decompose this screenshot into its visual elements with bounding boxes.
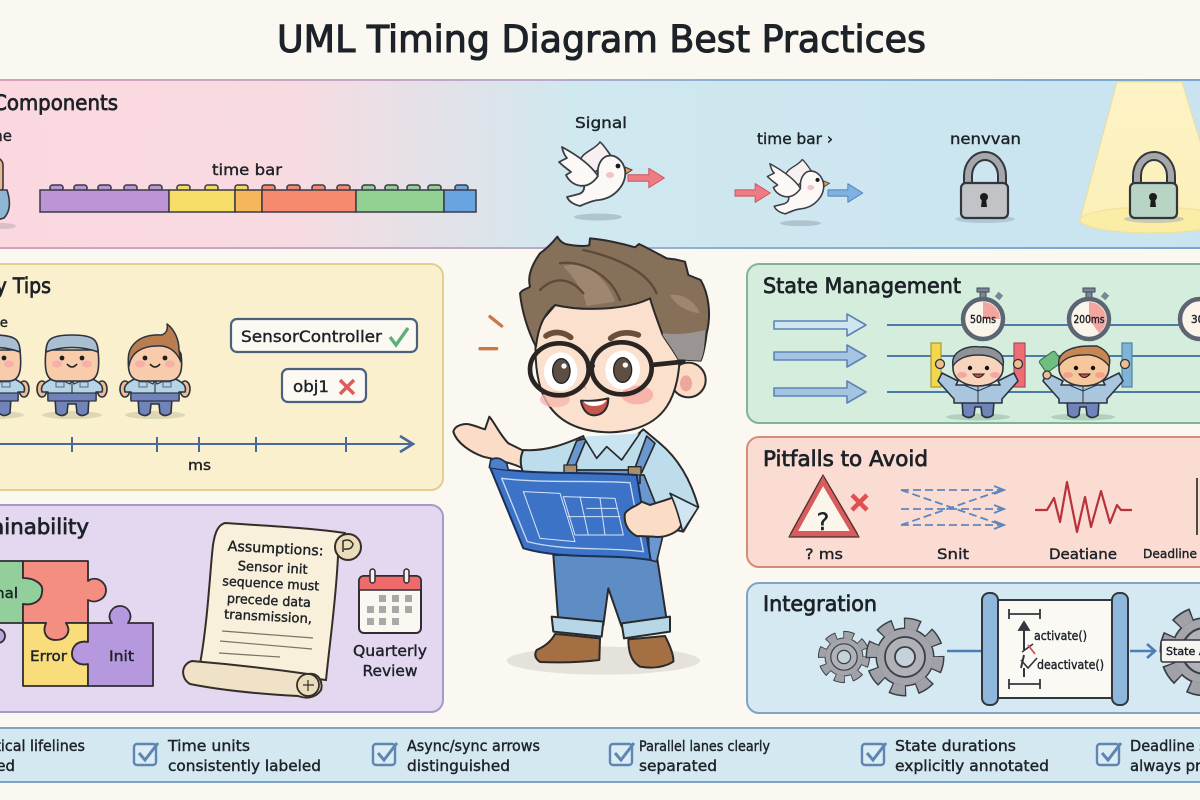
label: deatiane: Deatiane bbox=[1049, 547, 1117, 563]
chart: time axis bbox=[0, 436, 413, 452]
text: activate: activate() bbox=[1034, 628, 1087, 643]
label: unknown ms: ? ms bbox=[805, 547, 843, 563]
item: state durations bbox=[862, 737, 1049, 775]
glasses bbox=[530, 342, 683, 395]
boots bbox=[535, 634, 600, 662]
icon: spotlight beam bbox=[1080, 82, 1200, 233]
arrows: lane inputs bbox=[774, 314, 866, 403]
item: state durations: State durations bbox=[895, 737, 1016, 755]
heading: state management: State Management bbox=[763, 274, 961, 298]
item: vertical lifelines bbox=[0, 737, 85, 775]
panel: pitfalls to avoid bbox=[747, 437, 1200, 567]
icon: calendar bbox=[359, 569, 421, 633]
label: quarterly review: Quarterly bbox=[353, 642, 427, 660]
label: nenvvan: nenvvan bbox=[950, 130, 1021, 148]
sparks bbox=[480, 317, 502, 349]
right sleeve and hand bbox=[625, 497, 682, 537]
item: async sync arrows bbox=[373, 737, 540, 775]
item: parallel lanes: separated bbox=[639, 757, 717, 775]
icon: stopwatch clipped bbox=[1180, 299, 1200, 339]
item: time units: Time units bbox=[167, 737, 250, 755]
blueprint sheet bbox=[490, 467, 651, 560]
chart: brick time bar bbox=[40, 185, 476, 212]
shirt body bbox=[567, 429, 698, 532]
label: snit: Snit bbox=[937, 547, 969, 563]
item: async sync arrows: distinguished bbox=[407, 757, 510, 775]
icon: state gear with label bbox=[1161, 613, 1200, 689]
illustration: engineer mascot holding blueprint bbox=[453, 237, 709, 675]
label: signal: Signal bbox=[575, 114, 627, 132]
text: assumptions: precede data bbox=[227, 592, 311, 611]
ear bbox=[671, 363, 706, 397]
icon: dove with outgoing arrow bbox=[559, 142, 664, 220]
icon: stopwatch 200ms: 200ms bbox=[1074, 314, 1104, 326]
label: quarterly review: Review bbox=[362, 662, 418, 680]
callout: good name: SensorController bbox=[241, 327, 382, 346]
label: error piece: Error bbox=[30, 649, 67, 665]
label: time bar second: time bar › bbox=[757, 130, 833, 148]
item: state durations: explicitly annotated bbox=[895, 757, 1049, 775]
panel: naming tips bbox=[0, 264, 443, 490]
arrow: document to state gear bbox=[1130, 644, 1155, 658]
heading: pitfalls: Pitfalls to Avoid bbox=[763, 447, 928, 471]
icon: warning triangle bbox=[789, 475, 867, 537]
icon: jigsaw pieces bbox=[0, 561, 153, 686]
callout: good name bbox=[231, 319, 417, 352]
item: async sync arrows: Async/sync arrows bbox=[407, 737, 540, 755]
heading: integration: Integration bbox=[763, 592, 877, 616]
callout: bad name bbox=[282, 369, 366, 402]
text: assumptions bbox=[220, 538, 324, 628]
text: assumptions: Sensor init bbox=[237, 559, 308, 578]
icon: clipped worker bbox=[0, 335, 29, 419]
title: UML Timing Diagram Best Practices bbox=[277, 18, 926, 61]
label: quarterly review bbox=[353, 642, 427, 680]
panel: integration bbox=[747, 583, 1200, 713]
icon: worker with cap bbox=[37, 335, 107, 419]
overalls straps and bib bbox=[566, 438, 587, 471]
panel: state management bbox=[747, 264, 1200, 423]
label: time bar: time bar bbox=[212, 161, 283, 179]
hair bbox=[520, 237, 709, 361]
panel: maintainability bbox=[0, 505, 443, 712]
arrow: gears to document bbox=[947, 650, 981, 652]
jeans bbox=[553, 555, 667, 627]
panel: checklist strip bbox=[0, 728, 1200, 782]
label: init piece: Init bbox=[109, 649, 135, 665]
eyes bbox=[544, 352, 577, 391]
label: deadline: Deadline bbox=[1143, 546, 1197, 561]
icon: worker holding yellow and red bars bbox=[931, 343, 1025, 420]
panel: key components bbox=[0, 79, 1200, 249]
icon: dove between arrows bbox=[735, 160, 863, 226]
item: deadline bbox=[1097, 737, 1200, 775]
icon: grey padlock bbox=[955, 156, 1015, 223]
item: time units: consistently labeled bbox=[168, 757, 321, 775]
icon: assumptions scroll bbox=[183, 523, 361, 698]
icon: gears bbox=[822, 624, 938, 690]
nose and mouth bbox=[582, 380, 587, 389]
icon: tangled dashed arrows bbox=[901, 486, 1004, 529]
text: assumptions: transmission, bbox=[224, 608, 312, 627]
icon: clipped lifeline worker bbox=[0, 158, 16, 229]
text: deactivate: deactivate() bbox=[1037, 657, 1104, 672]
item: time units bbox=[134, 737, 321, 775]
icon: highlighted padlock bbox=[1124, 156, 1184, 223]
icon: stopwatch 50ms bbox=[963, 288, 1003, 339]
item: parallel lanes bbox=[610, 739, 770, 775]
icon: warning triangle: ? bbox=[817, 508, 829, 536]
text: assumptions: Assumptions: bbox=[227, 539, 324, 560]
chart: jitter waveform bbox=[1035, 482, 1132, 532]
face bbox=[535, 297, 680, 432]
icon: worker with hair bbox=[120, 324, 190, 419]
left arm and hand bbox=[453, 417, 528, 472]
lifeline lanes bbox=[887, 325, 1200, 392]
icon: stopwatch 50ms: 50ms bbox=[970, 314, 996, 326]
eyebrows bbox=[546, 332, 638, 338]
icon: clipped deadline sign bbox=[1196, 478, 1198, 535]
text: assumptions: sequence must bbox=[222, 574, 320, 594]
icon: sequence scroll bbox=[982, 593, 1128, 705]
icon: worker holding green and blue bars bbox=[1039, 343, 1132, 420]
label: ms: ms bbox=[188, 458, 211, 474]
item: parallel lanes: Parallel lanes clearly bbox=[639, 739, 770, 755]
icon: stopwatch 200ms bbox=[1069, 288, 1109, 339]
callout: bad name: obj1 bbox=[293, 377, 329, 396]
